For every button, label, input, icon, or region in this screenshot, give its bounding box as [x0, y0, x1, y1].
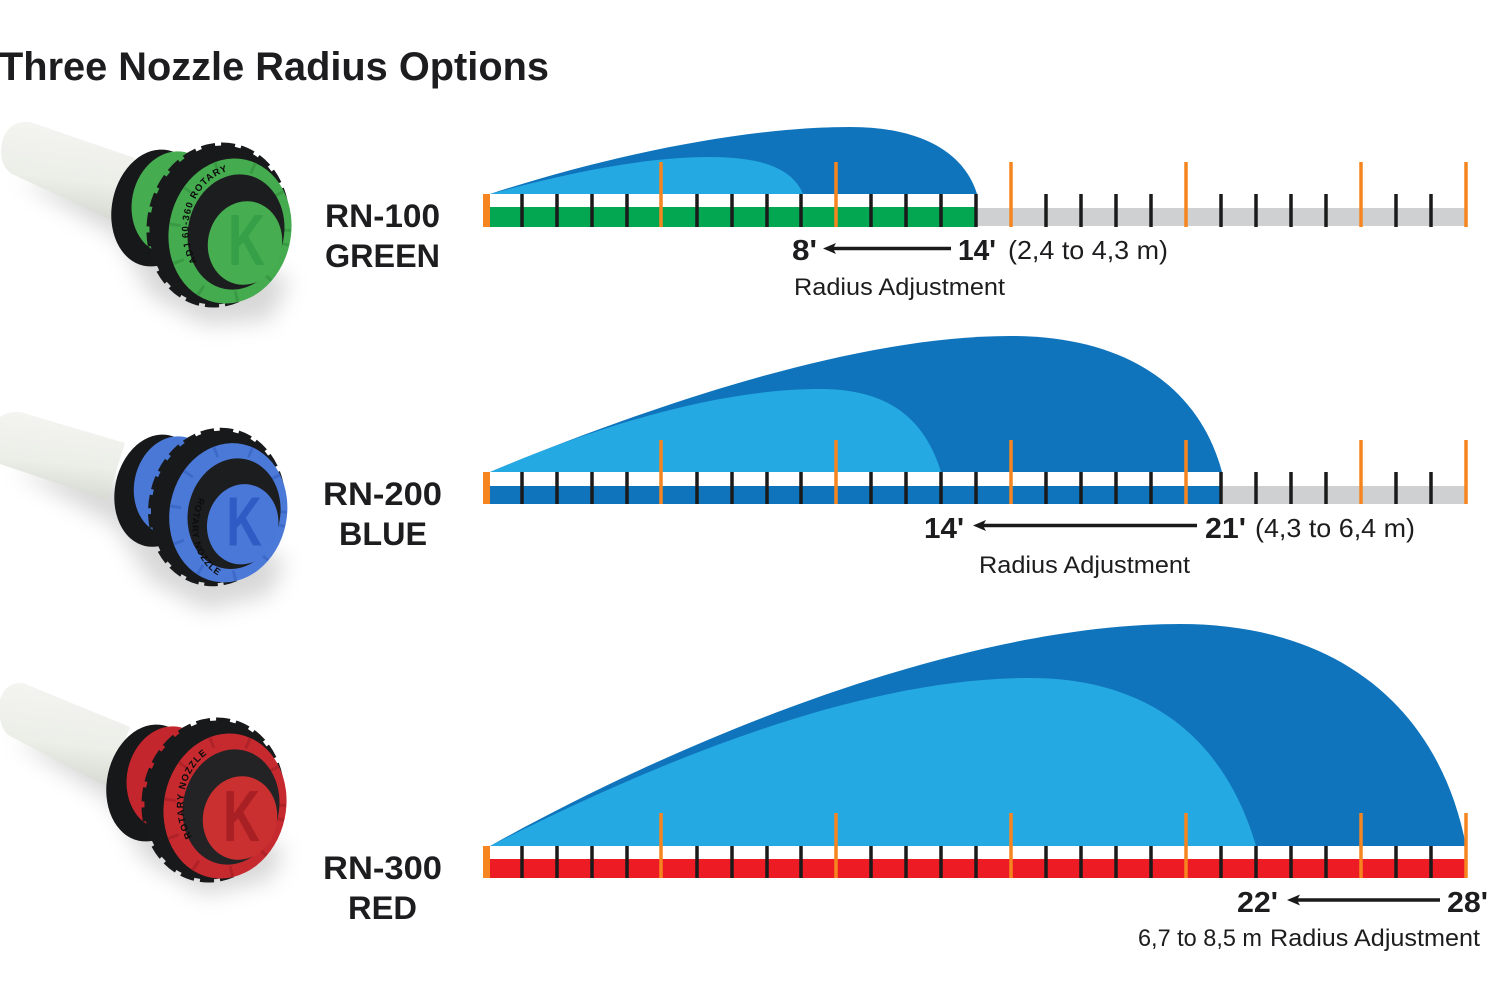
- label: RN-100 GREEN: RN-100: [325, 198, 440, 234]
- label: RN-300 RED: RED: [348, 890, 417, 926]
- radius values and arrow: 8': [792, 235, 817, 267]
- caption: Radius Adjustment: [1270, 925, 1480, 952]
- icon: blue RN-200 nozzle: [0, 412, 288, 616]
- radius values and arrow: (4,3 to 6,4 m): [1255, 513, 1415, 543]
- label: RN-200 BLUE: RN-200: [323, 476, 442, 512]
- radius values and arrow: 14': [924, 513, 964, 545]
- icon: green RN-100 nozzle: ADJ 60-360 ROTARY: [182, 165, 225, 263]
- caption: [1138, 925, 1480, 952]
- label: RN-300 RED: RN-300: [323, 850, 442, 886]
- scale bar: [483, 440, 1467, 504]
- icon: red RN-300 nozzle: ROTARY NOZZLE: [176, 749, 206, 840]
- spray arc: maximum radius: [490, 624, 1466, 846]
- spray arc: maximum radius: [490, 336, 1222, 472]
- spray arc: minimum radius: [490, 389, 941, 472]
- radius values and arrow: [1237, 887, 1488, 919]
- icon: blue RN-200 nozzle: K: [226, 482, 262, 560]
- title: Three Nozzle Radius Options: [0, 45, 549, 89]
- label: RN-100 GREEN: GREEN: [325, 238, 440, 274]
- chart: RN-200 radius: [483, 336, 1467, 579]
- icon: green RN-100 nozzle: [1, 122, 292, 332]
- icon: blue RN-200 nozzle: ROTARY NOZZLE: [192, 498, 221, 576]
- chart: RN-100 radius: [483, 127, 1467, 301]
- scale bar: [483, 162, 1467, 227]
- radius values and arrow: 22': [1237, 887, 1278, 919]
- icon: red RN-300 nozzle: [0, 683, 288, 901]
- icon: red RN-300 nozzle: K: [223, 777, 260, 857]
- radius values and arrow: [792, 235, 1168, 267]
- caption: Radius Adjustment: [794, 274, 1005, 301]
- spray arc: maximum radius: [490, 127, 977, 194]
- caption: 6,7 to 8,5 m: [1138, 925, 1262, 952]
- label: RN-200 BLUE: [323, 476, 442, 552]
- icon: green RN-100 nozzle: K: [228, 201, 265, 281]
- radius values and arrow: 21': [1205, 513, 1246, 545]
- label: RN-300 RED: [323, 850, 442, 926]
- radius values and arrow: [924, 513, 1415, 545]
- label: RN-200 BLUE: BLUE: [339, 516, 427, 552]
- radius values and arrow: (2,4 to 4,3 m): [1008, 235, 1168, 265]
- scale bar: [483, 813, 1466, 878]
- label: RN-100 GREEN: [325, 198, 440, 274]
- chart: RN-300 radius: [483, 624, 1488, 952]
- caption: Radius Adjustment: [979, 552, 1190, 579]
- spray arc: minimum radius: [490, 157, 803, 194]
- spray arc: minimum radius: [490, 678, 1256, 846]
- radius values and arrow: 28': [1447, 887, 1488, 919]
- radius values and arrow: 14': [958, 235, 996, 267]
